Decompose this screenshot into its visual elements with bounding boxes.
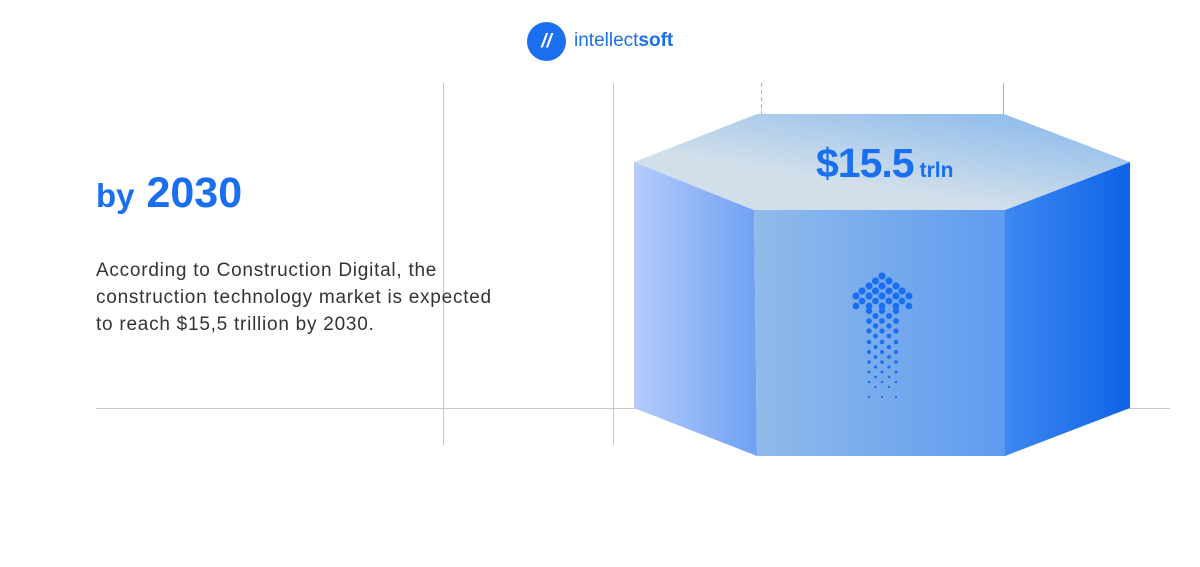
description text: construction technology market is expected	[96, 287, 492, 308]
description text: to reach $15,5 trillion by 2030.	[96, 314, 375, 335]
logo	[527, 22, 673, 61]
logo text: intellectsoft	[574, 30, 673, 51]
description text: According to Construction Digital, the	[96, 260, 437, 281]
heading: by 2030	[96, 169, 242, 217]
icon: logo circle: //	[541, 31, 552, 52]
value label: $15.5 trln	[816, 140, 953, 186]
icon: dotted up arrow	[852, 272, 913, 398]
block faces	[634, 114, 1130, 456]
icon: logo circle	[527, 22, 566, 61]
description text	[96, 260, 492, 335]
